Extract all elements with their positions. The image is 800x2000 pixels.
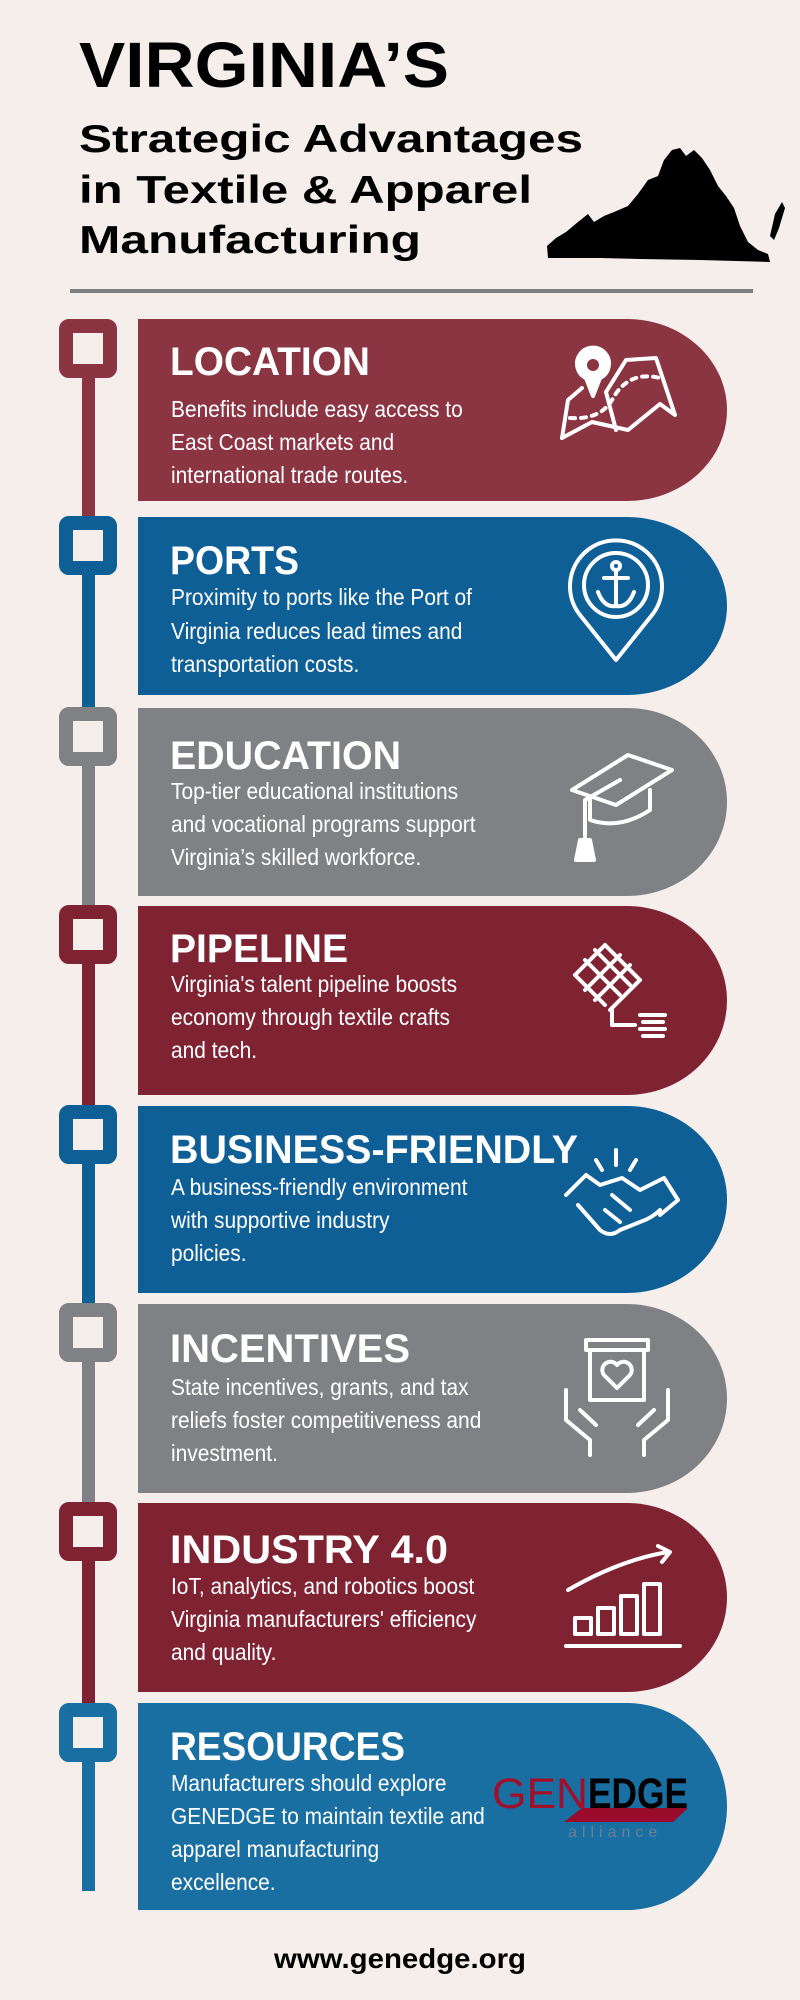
panel: business-friendly: A business-friendly environment bbox=[171, 1174, 467, 1200]
panel: business-friendly bbox=[138, 1106, 727, 1293]
icon: map pin bbox=[562, 348, 675, 438]
panel: ports: Proximity to ports like the Port of bbox=[171, 584, 473, 610]
panel: education: and vocational programs support bbox=[171, 811, 476, 837]
icon: hands with box bbox=[566, 1340, 668, 1455]
logo: genedge alliance: GEN bbox=[492, 1770, 588, 1818]
icon: handshake bbox=[566, 1150, 678, 1234]
subtitle: in Textile & Apparel bbox=[79, 169, 532, 212]
panel: incentives: State incentives, grants, and tax bbox=[171, 1374, 469, 1400]
panel: resources: Manufacturers should explore bbox=[171, 1770, 446, 1796]
panel: location bbox=[138, 319, 727, 501]
panel: ports: PORTS bbox=[170, 539, 299, 583]
panel: pipeline: Virginia's talent pipeline boosts bbox=[171, 971, 457, 997]
panel: education: EDUCATION bbox=[170, 734, 401, 778]
timeline bbox=[66, 326, 110, 1891]
panel: pipeline: PIPELINE bbox=[170, 927, 348, 971]
panel: business-friendly: BUSINESS-FRIENDLY bbox=[170, 1128, 578, 1172]
panel: education: Top-tier educational institutions bbox=[171, 778, 458, 804]
logo: genedge alliance: alliance bbox=[568, 1824, 662, 1841]
panel: resources: RESOURCES bbox=[170, 1725, 405, 1769]
panel: education: Virginia’s skilled workforce. bbox=[171, 844, 421, 870]
panel: location: LOCATION bbox=[170, 340, 370, 384]
panel: industry 4.0: INDUSTRY 4.0 bbox=[170, 1528, 448, 1572]
panel: pipeline bbox=[138, 906, 727, 1095]
panel: resources: GENEDGE to maintain textile and bbox=[171, 1803, 485, 1829]
panel: business-friendly: policies. bbox=[171, 1240, 247, 1266]
logo: genedge alliance bbox=[492, 1770, 688, 1841]
panel: incentives: INCENTIVES bbox=[170, 1327, 410, 1371]
panel: resources: apparel manufacturing bbox=[171, 1836, 379, 1862]
panel: incentives: investment. bbox=[171, 1440, 278, 1466]
panel: resources: excellence. bbox=[171, 1869, 276, 1895]
subtitle bbox=[79, 118, 583, 262]
title: VIRGINIA’S bbox=[79, 29, 449, 101]
panel: industry 4.0 bbox=[138, 1503, 727, 1692]
icon: anchor pin bbox=[570, 540, 662, 660]
panel: ports bbox=[138, 517, 727, 695]
subtitle: Manufacturing bbox=[79, 219, 421, 262]
panel: industry 4.0: Virginia manufacturers' efficiency bbox=[171, 1606, 476, 1632]
panel: ports: Virginia reduces lead times and bbox=[171, 618, 462, 644]
panel: resources bbox=[138, 1703, 727, 1910]
panel: location: East Coast markets and bbox=[171, 429, 394, 455]
icon: virginia map bbox=[547, 148, 785, 262]
panel: pipeline: and tech. bbox=[171, 1037, 257, 1063]
panel: ports: transportation costs. bbox=[171, 651, 359, 677]
title bbox=[79, 29, 583, 262]
icon: graduation cap bbox=[572, 755, 672, 860]
panel: industry 4.0: and quality. bbox=[171, 1639, 276, 1665]
panel: location: Benefits include easy access to bbox=[171, 396, 463, 422]
panel: incentives bbox=[138, 1304, 727, 1493]
icon: growth bars bbox=[566, 1546, 680, 1646]
panel: location: international trade routes. bbox=[171, 462, 408, 488]
panel: pipeline: economy through textile crafts bbox=[171, 1004, 450, 1030]
footer url: www.genedge.org bbox=[273, 1943, 526, 1974]
panel: incentives: reliefs foster competitiveness and bbox=[171, 1407, 481, 1433]
logo: genedge alliance: EDGE bbox=[588, 1770, 688, 1818]
subtitle: Strategic Advantages bbox=[79, 118, 583, 161]
panel: education bbox=[138, 708, 727, 896]
icon: weave knot bbox=[575, 945, 665, 1036]
panel: business-friendly: with supportive industry bbox=[170, 1207, 390, 1233]
panel: industry 4.0: IoT, analytics, and robotics boost bbox=[171, 1573, 474, 1599]
